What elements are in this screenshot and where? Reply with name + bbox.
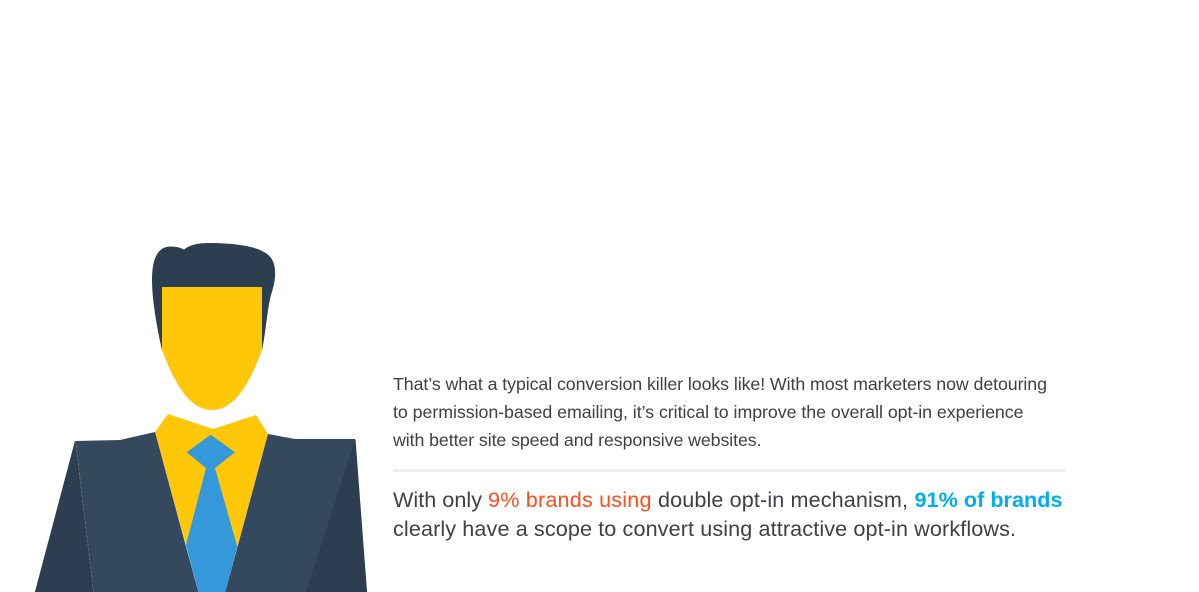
left sleeve seam: [76, 441, 94, 592]
left sleeve: [35, 441, 94, 592]
collar and shirt: [155, 414, 268, 560]
key statistic statement: [393, 487, 1062, 541]
suit jacket: [35, 432, 367, 592]
key statistic statement: With only: [393, 487, 482, 512]
body paragraph: with better site speed and responsive websites.: [392, 430, 762, 450]
body paragraph: That’s what a typical conversion killer looks like! With most marketers now detouring: [393, 374, 1047, 394]
body paragraph: [392, 374, 1047, 450]
key statistic statement: clearly have a scope to convert using attractive opt-in workflows.: [393, 516, 1016, 541]
key statistic statement: double opt-in mechanism,: [658, 487, 908, 512]
right sleeve: [306, 439, 367, 592]
body paragraph: to permission-based emailing, it’s critical to improve the overall opt-in experience: [393, 402, 1024, 422]
key statistic statement: 9% brands using: [488, 487, 652, 512]
divider: [393, 469, 1066, 472]
tie: [186, 435, 237, 592]
illustration: faceless businessman: [35, 243, 367, 592]
key statistic statement: 91% of brands: [914, 487, 1062, 512]
face: [162, 287, 262, 410]
hair: [152, 243, 275, 350]
